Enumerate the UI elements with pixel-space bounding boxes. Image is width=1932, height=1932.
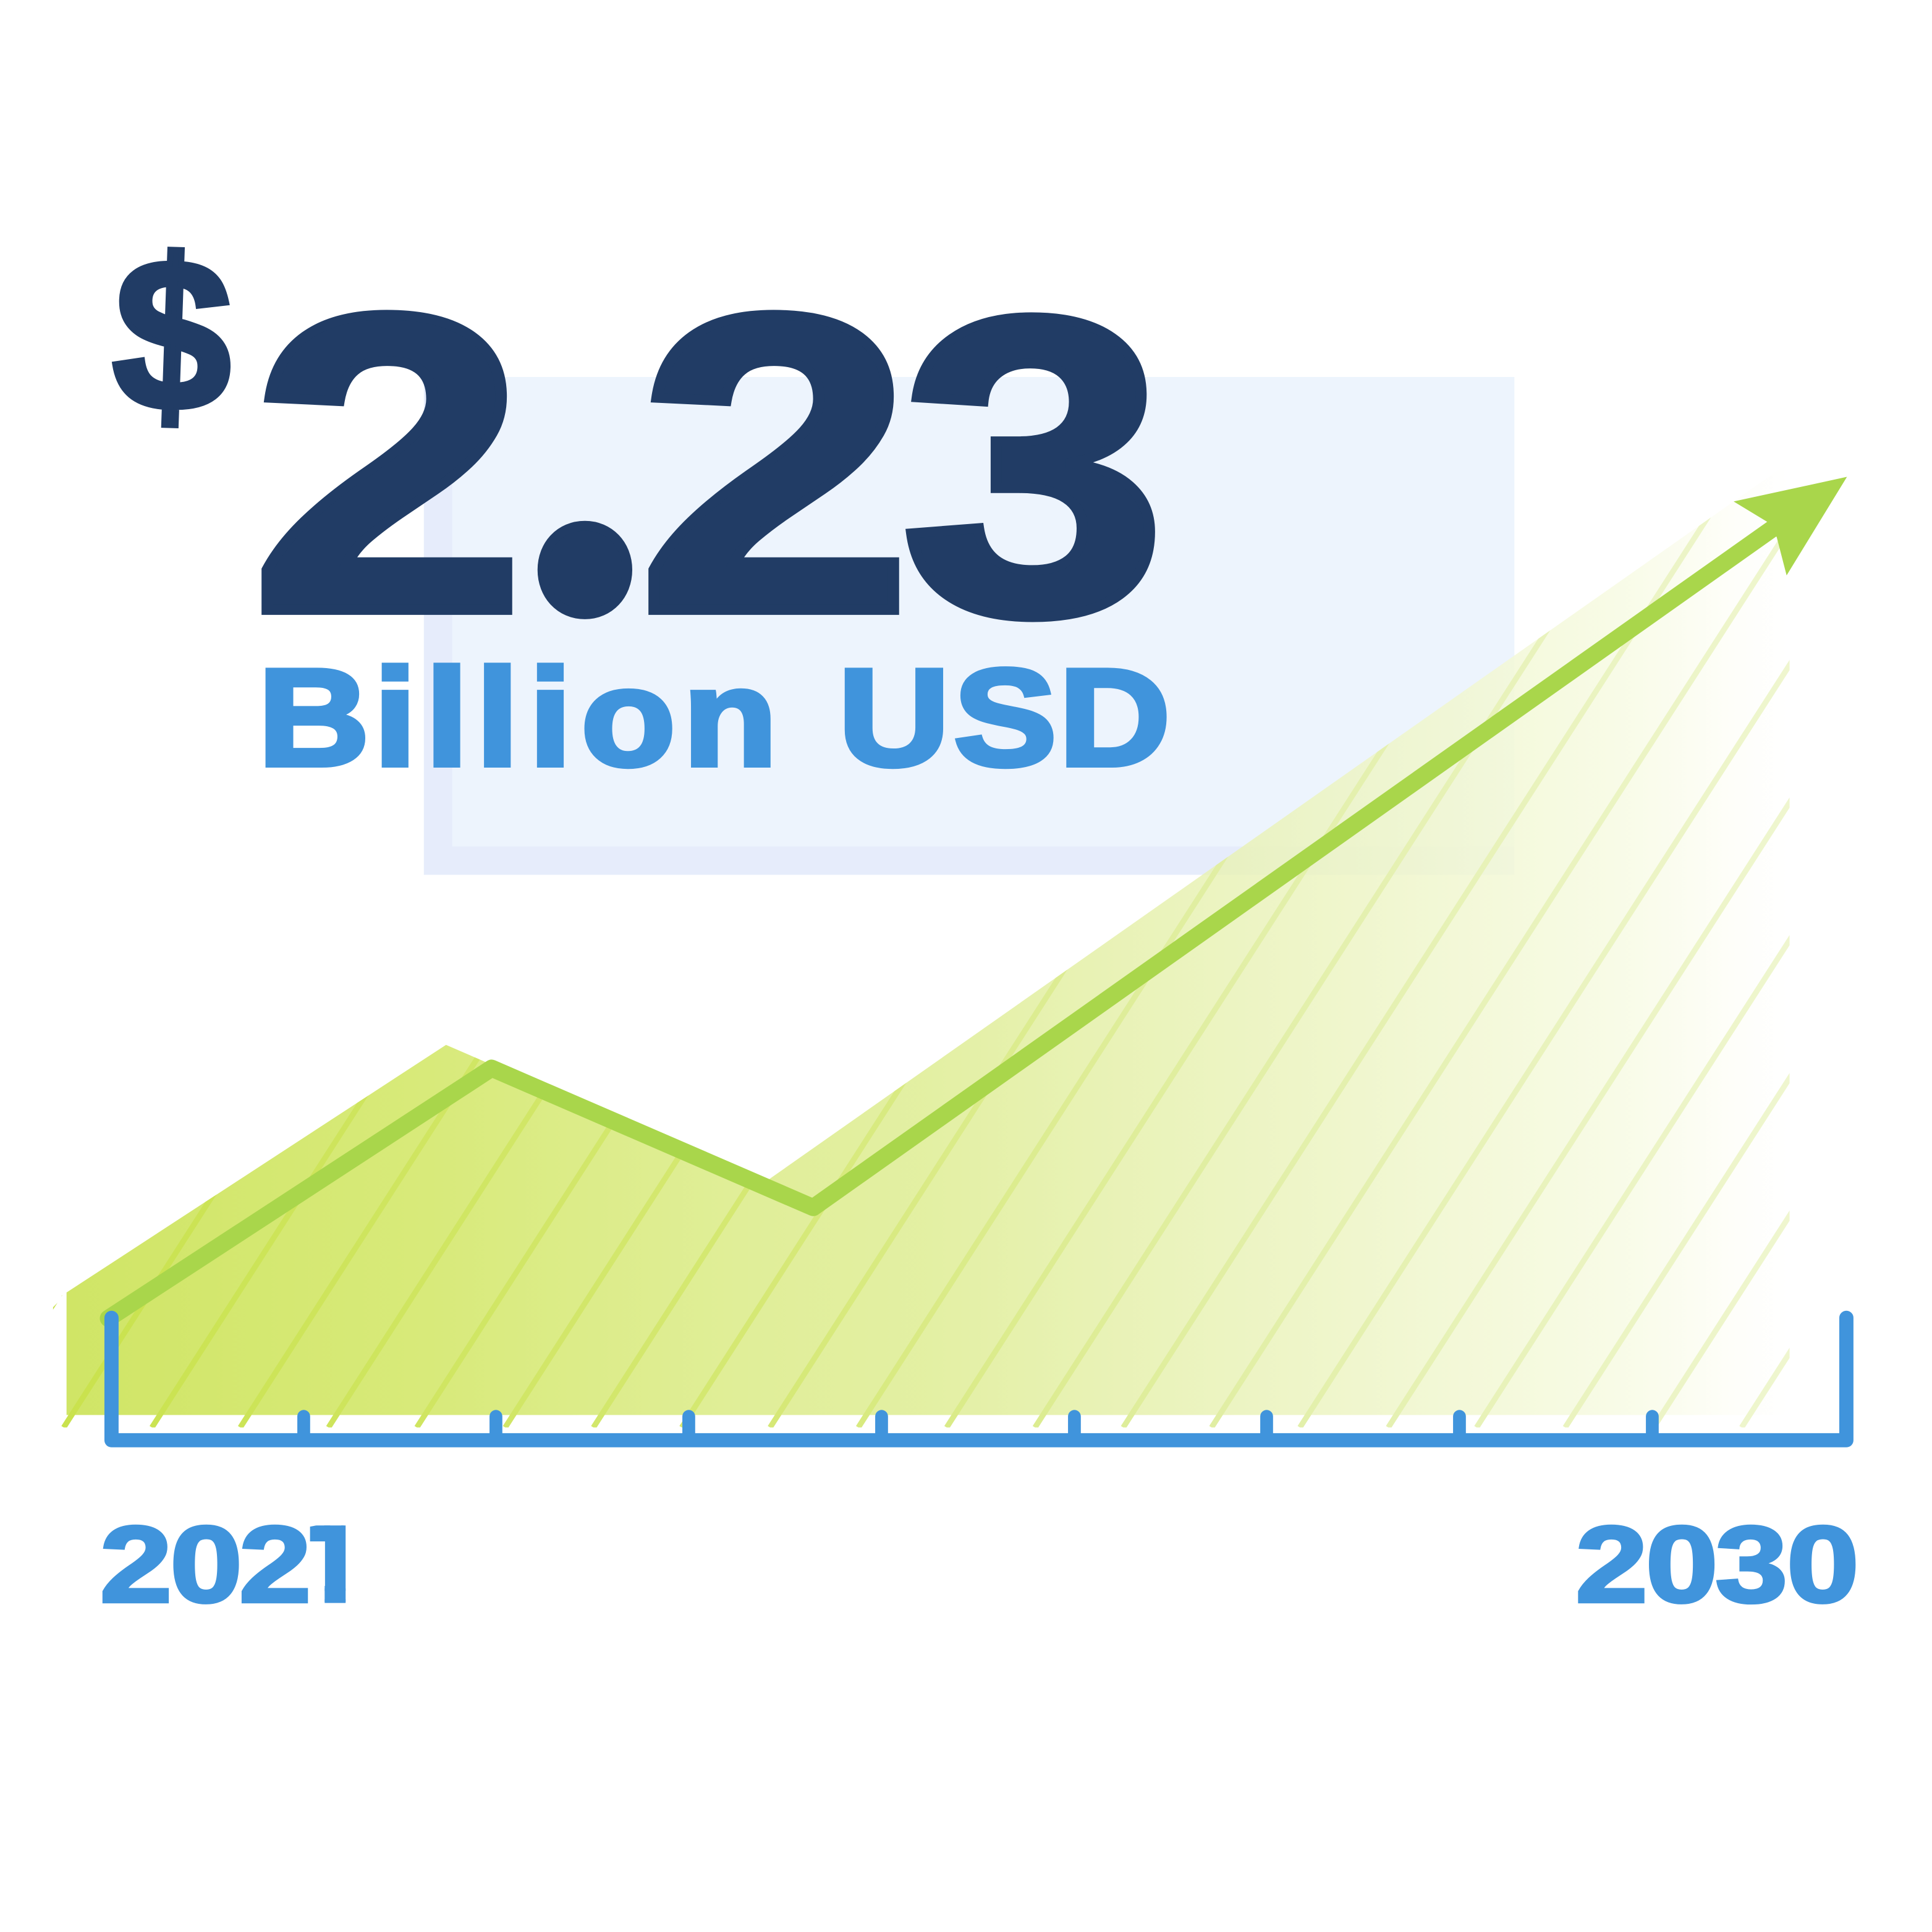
arrow head bbox=[1734, 477, 1847, 575]
panel: background rectangle shadow bbox=[424, 377, 1514, 875]
end year label: 2030 bbox=[1575, 1504, 1859, 1625]
main value 2.23: 2 bbox=[637, 228, 913, 700]
main value 2.23: 2 bbox=[250, 228, 527, 700]
area chart fill bbox=[67, 462, 1790, 1415]
start year label bbox=[103, 1524, 346, 1604]
hatch lines over area bbox=[53, 517, 1790, 1428]
unit label: Billion USD bbox=[258, 640, 1171, 795]
main value 2.23: . bbox=[514, 144, 655, 724]
dollar sign: $ bbox=[109, 214, 235, 457]
main value 2.23 bbox=[250, 144, 1167, 724]
panel: background rectangle bbox=[452, 377, 1514, 847]
start year label: 1 bbox=[300, 1473, 366, 1634]
trend line with arrow bbox=[108, 477, 1847, 1318]
start year label: 202 bbox=[100, 1504, 311, 1625]
timeline axis bbox=[111, 1318, 1846, 1440]
main value 2.23: 3 bbox=[900, 230, 1167, 702]
